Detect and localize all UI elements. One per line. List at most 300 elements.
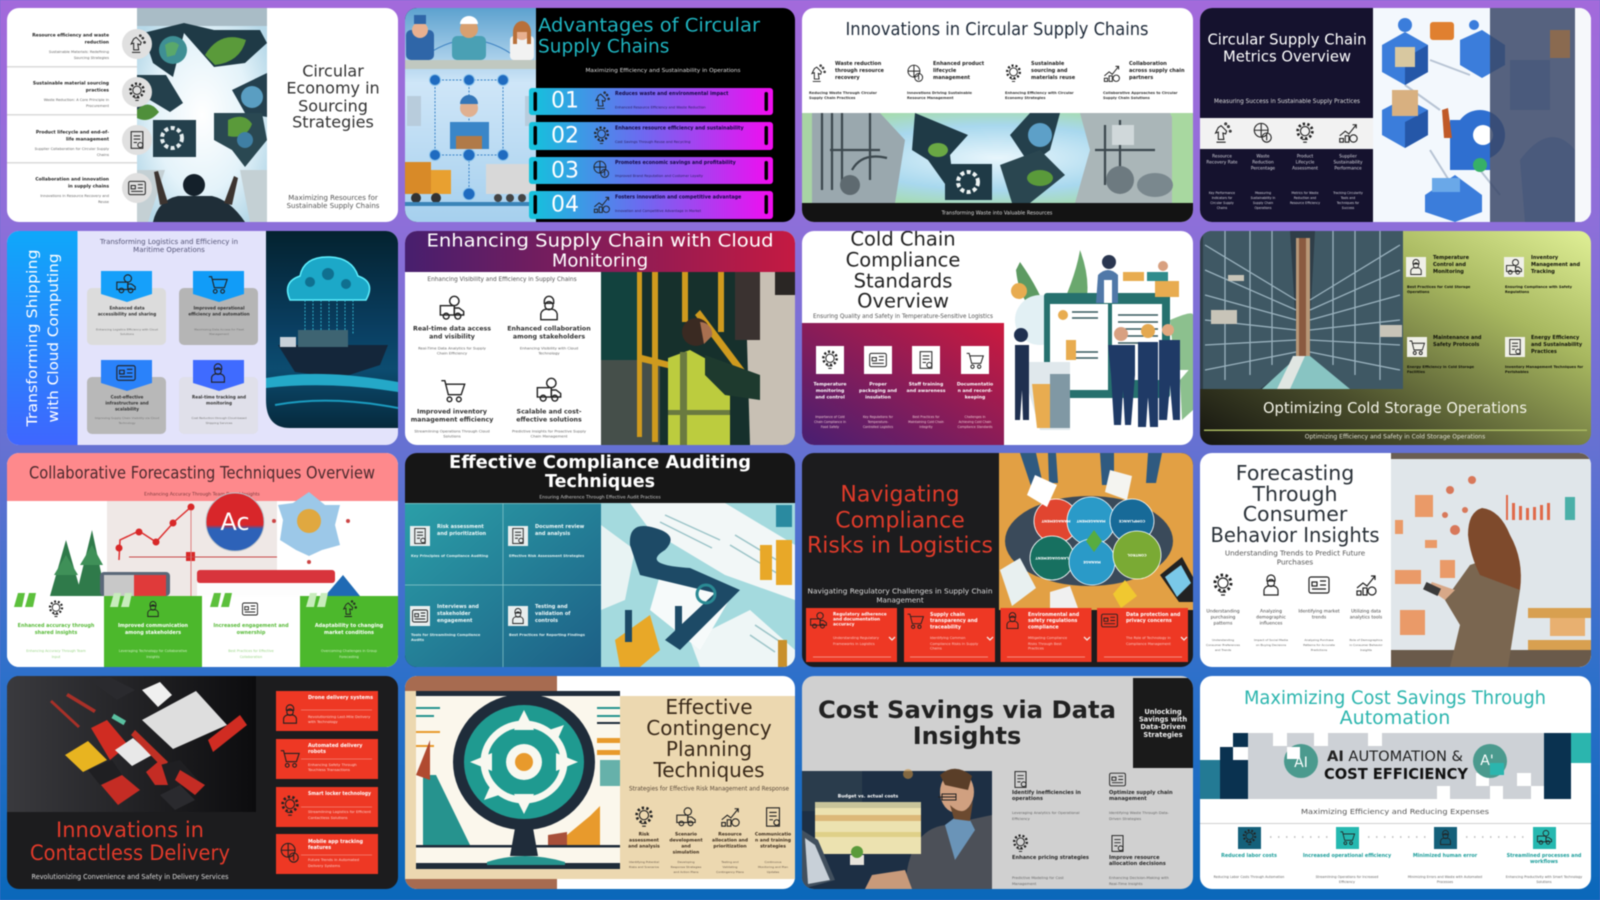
list: four sourcing strategies bbox=[7, 29, 152, 204]
panel: Cold Chain Compliance Standards Overview bbox=[802, 228, 1193, 445]
automation steps: Minimized human error bbox=[1413, 853, 1478, 859]
quote cards row: Overcoming Challenges in Group bbox=[321, 649, 377, 653]
benefit cards: Enhancing Logistics Efficiency with Cloud bbox=[96, 328, 158, 332]
insight columns: Identifying market bbox=[1298, 608, 1340, 614]
standards panel: Challenges in bbox=[965, 415, 985, 419]
technique columns: Contingency Plans bbox=[716, 870, 744, 874]
metric labels: Operations bbox=[1254, 206, 1272, 210]
insights grid: Identify inefficiencies in bbox=[1012, 790, 1081, 796]
standards panel: Achieving Cold Chain bbox=[959, 420, 991, 424]
technique columns: Response Strategies bbox=[671, 865, 702, 869]
audit grid: Testing and bbox=[535, 604, 568, 610]
metric labels: Recovery Rate bbox=[1206, 160, 1238, 166]
audit grid: Tools for Streamlining Compliance bbox=[411, 633, 481, 637]
technique columns: Updates bbox=[767, 870, 780, 874]
photo: analyst with budget table bbox=[802, 769, 992, 889]
image: workers and supply chain network bbox=[405, 8, 536, 222]
technique columns: Developing bbox=[678, 860, 695, 864]
risk cards: Compliance Risks in Supply bbox=[930, 642, 978, 646]
insight columns: influences bbox=[1260, 620, 1283, 626]
subheading: Maximizing Efficiency and Reducing Expenses bbox=[1301, 808, 1489, 816]
numbered list: Promotes economic savings and profitability bbox=[615, 160, 737, 166]
audit grid: engagement bbox=[437, 618, 473, 624]
four practice items: Practices bbox=[1531, 349, 1557, 355]
innovation cards: Enhancing Safety Through bbox=[308, 763, 357, 767]
automation steps: Efficiency bbox=[1339, 880, 1355, 884]
risk cards: Compliance Management bbox=[1126, 642, 1171, 646]
header: Collaborative Forecasting Techniques Overview bbox=[29, 464, 375, 482]
insight columns: Role of Demographics bbox=[1349, 638, 1383, 642]
title bbox=[286, 62, 380, 132]
benefit cards: Solutions bbox=[120, 332, 134, 336]
metric labels: Reduction bbox=[1252, 160, 1274, 166]
title: Techniques bbox=[545, 472, 655, 492]
insight columns: and Trends bbox=[1215, 648, 1232, 652]
standards panel: and control bbox=[815, 394, 845, 400]
four innovation columns: Collaboration bbox=[1129, 61, 1167, 67]
automation steps: Reduced labor costs bbox=[1221, 853, 1277, 859]
technique columns: and Action Plans bbox=[674, 870, 699, 874]
quote cards row: Forecasting bbox=[339, 655, 359, 659]
technique columns bbox=[628, 808, 791, 874]
title: Techniques bbox=[652, 758, 765, 782]
benefit cards: efficiency and automation bbox=[188, 312, 250, 316]
banner: AI automation and cost efficiency: AI AUTOMATION & bbox=[1327, 749, 1463, 765]
technique columns: Communicatio bbox=[755, 832, 791, 838]
image: flat lay stationery bbox=[7, 676, 256, 812]
heading: Transforming Logistics and Efficiency in bbox=[99, 238, 238, 246]
insight columns: Consumer Preferences bbox=[1206, 643, 1240, 647]
insights grid: Enhancing Decision-Making with bbox=[1109, 876, 1169, 880]
risk cards: Understanding Regulatory bbox=[833, 636, 879, 640]
image: team around table diagram: CONTROL bbox=[1127, 553, 1147, 557]
image: cloud and cargo ship bbox=[266, 231, 398, 428]
innovation cards: Smart locker technology bbox=[308, 791, 372, 797]
subheading: Enhancing Visibility and Efficiency in Supply Chains bbox=[427, 277, 577, 283]
metric labels: Measuring bbox=[1255, 191, 1271, 195]
list: four sourcing strategies: Waste Reduction: A Core Principle in bbox=[44, 98, 109, 102]
standards panel: n and record- bbox=[958, 388, 993, 394]
insight columns: Utilizing data bbox=[1351, 608, 1381, 614]
audit grid: Audits bbox=[411, 638, 424, 642]
benefits grid: among stakeholders bbox=[513, 334, 585, 340]
innovation cards: with Technology bbox=[308, 720, 338, 724]
list: four sourcing strategies: reduction bbox=[85, 40, 109, 46]
four practice items: Inventory bbox=[1531, 255, 1559, 261]
risk cards: Mitigating Compliance bbox=[1028, 636, 1067, 640]
photo: analyst with budget table: Budget vs. actual costs bbox=[838, 794, 898, 800]
technique columns: and bbox=[681, 844, 691, 850]
title: Maximizing Cost Savings Through bbox=[1244, 687, 1546, 709]
risk cards: accuracy bbox=[833, 622, 855, 628]
quote cards row: ownership bbox=[237, 630, 266, 636]
subtitle: Maximizing Resources for bbox=[288, 194, 378, 202]
technique columns: allocation and bbox=[712, 838, 748, 844]
insight columns: purchasing bbox=[1211, 614, 1236, 620]
four innovation columns: management bbox=[933, 75, 971, 81]
metric labels: Waste bbox=[1256, 154, 1270, 160]
risk cards: Data protection and bbox=[1126, 612, 1181, 618]
quote cards row: Adaptability to changing bbox=[315, 623, 384, 629]
innovation cards: Streamlining Logistics for Efficient bbox=[308, 810, 372, 814]
benefits grid: Real-time data access bbox=[413, 326, 491, 332]
risk cards: Frameworks in Logistics bbox=[833, 642, 875, 646]
panel: Cost Savings via Data Insights bbox=[802, 676, 1193, 889]
automation steps: Minimizing Errors and Waste with Automated bbox=[1408, 875, 1482, 879]
quote cards row: Increased engagement and bbox=[213, 623, 289, 629]
innovation cards: features bbox=[308, 845, 331, 851]
title: Metrics Overview bbox=[1223, 48, 1351, 66]
innovation cards: Drone delivery systems bbox=[308, 695, 373, 701]
banner: AI automation and cost efficiency: AI bbox=[1294, 755, 1308, 771]
numbered list: Innovation and Competitive Advantage in Market bbox=[615, 209, 702, 213]
title: Optimizing Cold Storage Operations bbox=[1263, 399, 1527, 417]
numbered list: 02 bbox=[551, 124, 579, 148]
image: circular industry bbox=[802, 113, 1193, 203]
subtitle: Optimizing Efficiency and Safety in Cold Storage Operations bbox=[1305, 434, 1485, 440]
title: Contactless Delivery bbox=[30, 841, 230, 865]
four innovation columns: recovery bbox=[835, 75, 860, 81]
innovation cards: Revolutionizing Last-Mile Delivery bbox=[308, 715, 371, 719]
four innovation columns: Supply Chain Practices bbox=[809, 96, 855, 100]
automation steps: Streamlined processes and bbox=[1507, 853, 1582, 859]
callout box: Unlocking bbox=[1144, 708, 1182, 716]
metric labels bbox=[1206, 154, 1363, 210]
image: isometric blue logistics bbox=[1373, 8, 1591, 222]
insight columns: trends bbox=[1312, 614, 1327, 620]
subtitle bbox=[808, 586, 992, 604]
callout box: Data-Driven bbox=[1140, 723, 1186, 731]
risk cards: and documentation bbox=[833, 616, 880, 622]
list: four sourcing strategies: Sustainable material sourcing bbox=[33, 80, 109, 86]
banner: AI automation and cost efficiency bbox=[1200, 733, 1591, 799]
list: four sourcing strategies: Reuse bbox=[98, 200, 110, 204]
audit grid: Effective Risk Assessment Strategies bbox=[509, 554, 584, 558]
standards panel: Compliance Standards bbox=[958, 425, 993, 429]
title: Standards bbox=[854, 270, 952, 292]
benefit cards: Management bbox=[209, 332, 230, 336]
insights grid: Efficiency bbox=[1012, 817, 1031, 821]
benefit cards: infrastructure and bbox=[105, 400, 149, 406]
audit grid: validation of bbox=[535, 611, 571, 617]
four practice items: and Sustainability bbox=[1531, 342, 1583, 348]
subtitle: Ensuring Adherence Through Effective Audit Practices bbox=[539, 494, 661, 500]
numbered list: 03 bbox=[551, 158, 579, 184]
footer band bbox=[802, 203, 1193, 222]
automation steps: workflows bbox=[1530, 859, 1558, 865]
four practice items: Energy Efficiency bbox=[1531, 335, 1580, 341]
title: Innovations in bbox=[56, 818, 204, 842]
audit grid bbox=[405, 503, 601, 667]
benefits grid: and visibility bbox=[429, 334, 475, 340]
subtitle bbox=[1225, 548, 1366, 566]
audit grid: and analysis bbox=[535, 531, 570, 537]
title: Circular bbox=[302, 62, 364, 80]
numbered list: Improved Brand Reputation and Customer Loyalty bbox=[615, 174, 703, 178]
title: Behavior Insights bbox=[1210, 523, 1380, 547]
footer band: Transforming Waste into Valuable Resources bbox=[941, 210, 1053, 216]
four innovation columns: Sustainable bbox=[1031, 61, 1065, 67]
risk cards: Supply chain bbox=[930, 612, 965, 618]
benefits grid: Enhancing Visibility with Cloud bbox=[520, 346, 579, 350]
standards panel: Controlled Logistics bbox=[863, 425, 894, 429]
panel: Effective Contingency Planning Techniques bbox=[405, 676, 795, 889]
title: Automation bbox=[1340, 707, 1450, 729]
title: Navigating bbox=[840, 482, 960, 508]
risk cards: Identifying Common bbox=[930, 636, 966, 640]
quote cards row: market conditions bbox=[324, 630, 374, 636]
image: team around table diagram: MANAGEMENT bbox=[1041, 519, 1071, 523]
standards panel: Staff training bbox=[909, 382, 943, 388]
insight columns: Impact of Social Media bbox=[1254, 638, 1288, 642]
title: Supply Chains bbox=[538, 36, 669, 58]
four innovation columns: lifecycle bbox=[933, 68, 957, 74]
rotated title: with Cloud Computing bbox=[46, 254, 62, 422]
benefits grid: effective solutions bbox=[516, 416, 582, 424]
benefit cards: Enhanced data bbox=[109, 306, 145, 310]
image: forecast chart, logo and trees bbox=[50, 492, 398, 596]
technique columns: strategies bbox=[760, 844, 786, 850]
title: Forecasting bbox=[1236, 461, 1354, 485]
technique columns: Monitoring and Plan bbox=[758, 865, 788, 869]
insight columns: on Buying Decisions bbox=[1256, 643, 1287, 647]
image: isometric audit documents bbox=[601, 503, 795, 667]
innovation cards: Future Trends in Automated bbox=[308, 858, 359, 862]
benefits grid: Predictive Insights for Proactive Supply bbox=[512, 428, 587, 434]
automation steps: Processes bbox=[1437, 880, 1453, 884]
four practice items: Operations bbox=[1407, 290, 1429, 294]
panel: Innovations in Contactless Delivery bbox=[7, 676, 398, 889]
benefit cards: accessibility and sharing bbox=[98, 312, 156, 316]
metric labels: Techniques for bbox=[1336, 201, 1360, 205]
audit grid: and prioritization bbox=[437, 531, 487, 537]
title bbox=[807, 482, 993, 558]
technique columns: simulation bbox=[673, 850, 699, 856]
innovation cards: robots bbox=[308, 749, 326, 755]
numbered list: Enhanced Resource Efficiency and Waste Reduction bbox=[615, 106, 706, 110]
four practice items: Ensuring Compliance with Safety bbox=[1505, 285, 1573, 289]
standards panel: Integrity bbox=[919, 425, 933, 429]
four practice items: Inventory Management Techniques for bbox=[1505, 365, 1583, 369]
benefits grid: Scalable and cost- bbox=[517, 408, 582, 416]
title bbox=[449, 453, 751, 492]
four innovation columns: Waste reduction bbox=[835, 61, 882, 67]
list: four sourcing strategies: Sourcing Strategies bbox=[74, 56, 109, 60]
four innovation columns: across supply chain bbox=[1129, 68, 1185, 74]
banner: AI automation and cost efficiency: A' bbox=[1480, 753, 1494, 769]
standards panel: Importance of Cold bbox=[815, 415, 845, 419]
risk cards: Environmental and bbox=[1028, 612, 1080, 618]
insights grid: Real-Time Insights bbox=[1109, 882, 1143, 886]
metric labels: Performance bbox=[1334, 166, 1362, 172]
numbered list: 01 bbox=[551, 88, 579, 114]
insight columns bbox=[1206, 575, 1383, 652]
metric labels: Sustainability bbox=[1333, 160, 1363, 166]
image: team around table diagram bbox=[999, 453, 1193, 610]
list: four sourcing strategies: Innovations in Resource Recovery and bbox=[40, 194, 109, 198]
insights grid bbox=[1012, 772, 1173, 886]
header: Monitoring bbox=[552, 250, 648, 272]
panel: Enhancing Supply Chain with Cloud Monitoring bbox=[405, 230, 795, 445]
four innovation columns: through resource bbox=[835, 68, 885, 74]
insights grid: Driven Strategies bbox=[1109, 817, 1141, 821]
panel: Innovations in Circular Supply Chains bbox=[802, 8, 1193, 222]
four practice items: Perishables bbox=[1505, 370, 1529, 374]
innovation cards: Automated delivery bbox=[308, 743, 363, 749]
benefits grid bbox=[411, 296, 591, 438]
four practice items: Safety Protocols bbox=[1433, 342, 1479, 348]
risk cards: Regulatory adherence bbox=[833, 612, 887, 618]
insight columns: analytics tools bbox=[1350, 614, 1383, 620]
four innovation columns: Resource Management bbox=[907, 96, 954, 100]
standards panel: keeping bbox=[965, 394, 985, 400]
numbered list: 04 bbox=[551, 192, 579, 218]
list: four sourcing strategies: Procurement bbox=[86, 104, 110, 108]
four innovation columns: Collaborative Approaches to Circular bbox=[1103, 91, 1178, 95]
image: warehouse worker bbox=[601, 272, 795, 445]
title: Planning bbox=[666, 737, 752, 761]
callout box: Savings with bbox=[1139, 716, 1187, 724]
subtitle bbox=[287, 194, 380, 210]
four practice items: Management and bbox=[1531, 262, 1580, 268]
quote cards row: Input bbox=[52, 655, 61, 659]
numbered list: Fosters innovation and competitive advantage bbox=[615, 194, 742, 200]
benefit cards: Shipping Services bbox=[206, 421, 233, 425]
insight columns: Predictions bbox=[1311, 648, 1328, 652]
list: four sourcing strategies: practices bbox=[86, 88, 109, 94]
title: Effective bbox=[665, 695, 753, 719]
risk cards: Practices bbox=[1028, 646, 1044, 650]
benefits grid: management efficiency bbox=[411, 416, 493, 424]
header bbox=[7, 453, 398, 501]
metric labels: Resource Efficiency bbox=[1290, 201, 1320, 205]
subtitle: Sustainable Supply Chains bbox=[287, 202, 380, 210]
panel: Optimizing Cold Storage Operations bbox=[1200, 231, 1591, 445]
risk cards: compliance bbox=[1028, 624, 1059, 630]
insights grid: Identifying Waste Through Data- bbox=[1109, 811, 1170, 815]
panel: Forecasting Through Consumer Behavior Insights bbox=[1200, 453, 1591, 667]
four practice items: Control and bbox=[1433, 262, 1466, 268]
metric icon strip bbox=[1200, 118, 1373, 149]
audit grid: Interviews and bbox=[437, 604, 479, 610]
technique columns: Validating bbox=[723, 865, 738, 869]
title bbox=[1244, 687, 1546, 729]
standards panel: insulation bbox=[865, 394, 891, 400]
numbered list bbox=[529, 88, 773, 219]
subtitle: Navigating Regulatory Challenges in Supply Chain bbox=[808, 586, 992, 596]
title bbox=[818, 696, 1116, 750]
numbered list: Reduces waste and environmental impact bbox=[615, 91, 729, 97]
subtitle: Strategies for Effective Risk Management and Response bbox=[629, 786, 789, 792]
title bbox=[1208, 32, 1366, 62]
subtitle: Measuring Success in Sustainable Supply Practices bbox=[1214, 99, 1360, 105]
insight columns: Insights bbox=[1360, 648, 1372, 652]
risk cards bbox=[806, 608, 1188, 662]
four practice items: Temperature bbox=[1433, 255, 1470, 261]
technique columns: assessment bbox=[629, 838, 660, 844]
subtitle: Ensuring Quality and Safety in Temperature-Sensitive Logistics bbox=[813, 314, 993, 320]
metric labels: Assessment bbox=[1292, 166, 1318, 172]
automation steps: Reducing Labor Costs Through Automation bbox=[1214, 875, 1284, 879]
callout box bbox=[1133, 678, 1193, 768]
title: Economy in bbox=[286, 78, 380, 98]
insight columns: Analyzing bbox=[1260, 608, 1282, 614]
automation steps: Enhancing Productivity with Smart Technology bbox=[1506, 875, 1582, 879]
image: magnifier with gear target bbox=[416, 691, 620, 869]
four innovation columns: Economy Strategies bbox=[1005, 96, 1045, 100]
title: Circular Supply Chain bbox=[1207, 32, 1367, 48]
quote cards row: Best Practices for Effective bbox=[228, 649, 274, 653]
standards panel: Food Safety bbox=[821, 425, 839, 429]
benefits grid: Solutions bbox=[443, 434, 461, 438]
automation steps: Solutions bbox=[1536, 880, 1552, 884]
automation steps: Streamlining Operations for Increased bbox=[1316, 875, 1378, 879]
list: four sourcing strategies: Collaboration and innovation bbox=[35, 176, 109, 182]
header: Enhancing Supply Chain with Cloud bbox=[426, 230, 774, 252]
title bbox=[1210, 461, 1380, 547]
insights grid: management bbox=[1109, 796, 1147, 802]
benefit cards: Real-time tracking and bbox=[192, 394, 246, 400]
standards panel: Maintaining Cold Chain bbox=[908, 420, 944, 424]
metric labels: Lifecycle bbox=[1296, 160, 1315, 166]
list: four sourcing strategies: Resource efficiency and waste bbox=[32, 32, 109, 38]
standards panel: Best Practices for bbox=[912, 415, 940, 419]
quote cards row: Enhanced accuracy through bbox=[18, 623, 95, 629]
insight columns: Understanding bbox=[1206, 608, 1240, 614]
innovation cards bbox=[276, 691, 378, 874]
subtitle: Understanding Trends to Predict Future bbox=[1225, 548, 1366, 558]
audit grid: controls bbox=[535, 618, 558, 624]
metric labels: Key Performance bbox=[1209, 191, 1235, 195]
four practice items bbox=[1406, 255, 1583, 374]
technique columns: and analysis bbox=[628, 844, 660, 850]
technique columns: Resource bbox=[718, 832, 742, 838]
list: four sourcing strategies: Chains bbox=[97, 153, 109, 157]
four practice items: Tracking bbox=[1531, 269, 1555, 275]
metric labels: Resource bbox=[1212, 154, 1232, 160]
four practice items: Monitoring bbox=[1433, 269, 1464, 275]
standards panel: Temperature bbox=[813, 382, 847, 388]
quote cards row: Collaboration bbox=[240, 655, 262, 659]
insights grid: allocation decisions bbox=[1109, 861, 1166, 867]
list: four sourcing strategies: life management bbox=[66, 136, 110, 142]
four innovation columns: Enhanced product bbox=[933, 61, 985, 67]
image: team around table diagram: MANAGE bbox=[1083, 560, 1101, 564]
standards panel: Proper bbox=[869, 382, 887, 388]
metric labels: Sustainability in bbox=[1251, 196, 1275, 200]
standards panel: Chain Compliance in bbox=[814, 420, 846, 424]
technique columns: prioritization bbox=[713, 844, 747, 850]
image: team around table diagram: MANAGEMENT bbox=[1076, 519, 1106, 523]
insights grid: Enhance pricing strategies bbox=[1012, 855, 1089, 861]
four innovation columns bbox=[809, 61, 1185, 100]
list: four sourcing strategies: Supplier Collaboration for Circular Supply bbox=[35, 147, 110, 151]
metric labels: Indicators for bbox=[1212, 196, 1233, 200]
title bbox=[30, 818, 230, 865]
title bbox=[646, 695, 772, 782]
audit grid: stakeholder bbox=[437, 611, 471, 617]
risk cards: Chains bbox=[930, 646, 942, 650]
four innovation columns: partners bbox=[1129, 75, 1153, 81]
benefit cards bbox=[87, 271, 258, 434]
insights grid: Improve resource bbox=[1109, 855, 1160, 861]
benefits grid: Streamlining Operations Through Cloud bbox=[414, 428, 490, 434]
metric labels: Tools and bbox=[1340, 196, 1355, 200]
metric labels: Metrics for Waste bbox=[1292, 191, 1319, 195]
list: four sourcing strategies: Product lifecycle and end-of- bbox=[36, 130, 109, 136]
four innovation columns: materials reuse bbox=[1031, 75, 1076, 81]
four practice items: Best Practices for Cold Storage bbox=[1407, 285, 1471, 289]
